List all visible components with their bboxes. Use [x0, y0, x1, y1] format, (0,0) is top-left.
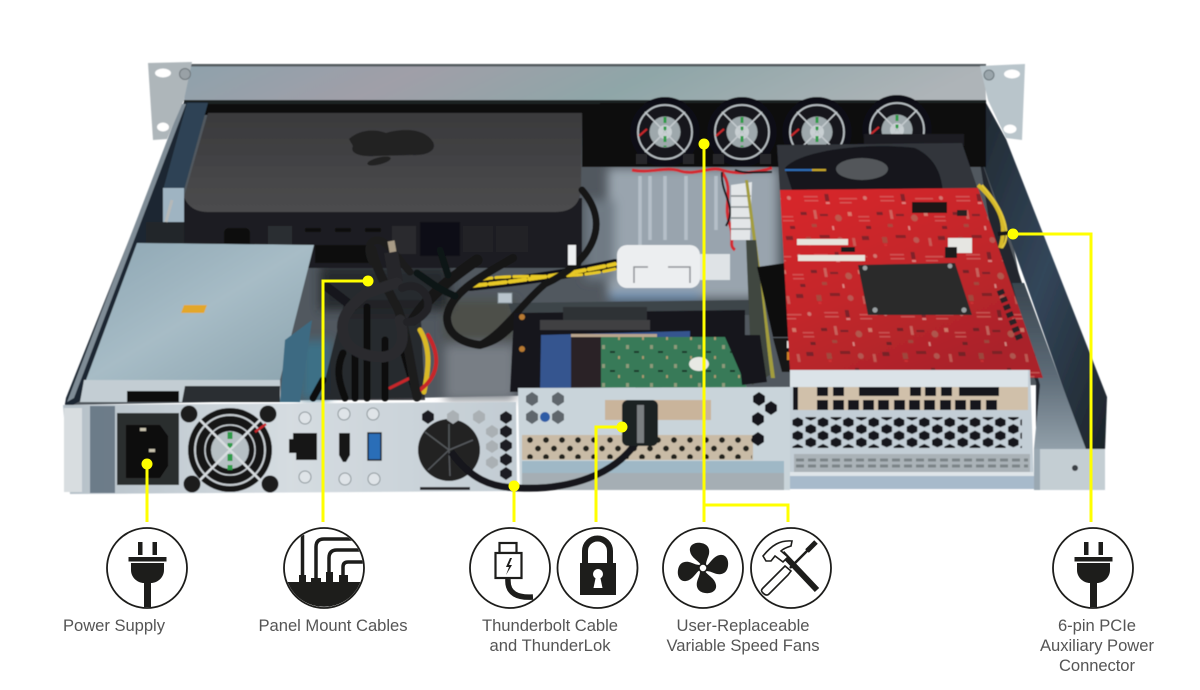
USB port [368, 433, 381, 460]
label: user-replaceable fans: User-Replaceable [676, 616, 810, 635]
small ring [402, 286, 428, 322]
icon: PCIe plug [1053, 528, 1133, 608]
M.2 adapter and drive [510, 307, 747, 392]
power supply [80, 243, 314, 402]
icon: hammer and screwdriver [751, 528, 831, 608]
dark mass behind the cable bundle [320, 300, 425, 400]
icon: fan [663, 528, 743, 608]
left cable [327, 287, 353, 307]
label: PCIe auxiliary power: 6-pin PCIe [1058, 616, 1136, 635]
back of chassis behind the Mac mini [186, 103, 600, 167]
label: PCIe auxiliary power: Auxiliary Power [1040, 636, 1154, 655]
icon: padlock [558, 528, 638, 608]
rear fans [630, 95, 932, 167]
ventilation holes [422, 410, 512, 480]
callout: PCIe power [1008, 228, 1091, 522]
large ring [342, 283, 402, 357]
callout: power supply [142, 458, 152, 522]
right rack ear [980, 64, 1025, 140]
left rack ear [148, 62, 192, 140]
label: thunderbolt cable and ThunderLok: Thunderbolt Cable [482, 616, 618, 635]
green interface board [601, 337, 747, 388]
label: thunderbolt cable and ThunderLok: and ThunderLok [490, 636, 611, 655]
cable grommet [418, 419, 480, 481]
label: PCIe auxiliary power [1040, 616, 1154, 675]
PCIe card bracket [790, 370, 1034, 489]
exhaust fan [180, 406, 278, 492]
left wall [64, 102, 208, 410]
red graphics card [780, 188, 1043, 378]
floor of the enclosure [70, 103, 1040, 405]
label: panel mount cables: Panel Mount Cables [258, 616, 408, 635]
interior fan bay [600, 103, 986, 167]
top loop [369, 240, 410, 272]
adapter bracket [518, 387, 790, 490]
ferrite choke [568, 245, 730, 288]
callout: thunderbolt cable [508, 480, 520, 522]
power inlet [117, 413, 179, 485]
callout: fans [698, 138, 788, 522]
label: user-replaceable fans: Variable Speed Fans [666, 636, 820, 655]
fan wiring [632, 168, 772, 250]
label: thunderbolt cable and ThunderLok [482, 616, 618, 655]
yellow power bundle [470, 264, 615, 286]
icon: panel mount cables [284, 528, 364, 608]
Mac mini power cable [480, 190, 596, 345]
internal cables [313, 190, 615, 400]
heat sink [858, 263, 972, 315]
label: PCIe auxiliary power: Connector [1059, 656, 1135, 675]
right wall [978, 103, 1107, 450]
callout: thunderlok [596, 422, 628, 522]
icon: thunderbolt connector [470, 528, 550, 608]
port cables [447, 258, 520, 345]
corner bracket [1040, 449, 1105, 490]
label: user-replaceable fans [666, 616, 820, 655]
riser and connector strip [731, 180, 806, 385]
lower cable mass [313, 307, 417, 398]
Ethernet port [289, 433, 317, 460]
icon: power plug [107, 528, 187, 608]
connector sleeve [391, 252, 396, 282]
label: power supply: Power Supply [63, 616, 166, 635]
rear rail [184, 65, 986, 103]
panel screws [299, 408, 380, 485]
red and yellow wires [420, 330, 428, 392]
Apple logo [349, 130, 434, 167]
callout: panel mount cables [323, 276, 374, 522]
rear I/O panel [63, 402, 517, 494]
HDMI port [339, 433, 350, 462]
graphics card blower [777, 143, 1018, 248]
Mac mini [184, 113, 582, 268]
floor strip right of the card [978, 150, 1086, 449]
ThunderLok and Thunderbolt cable [451, 400, 658, 488]
chassis photograph [63, 62, 1107, 494]
